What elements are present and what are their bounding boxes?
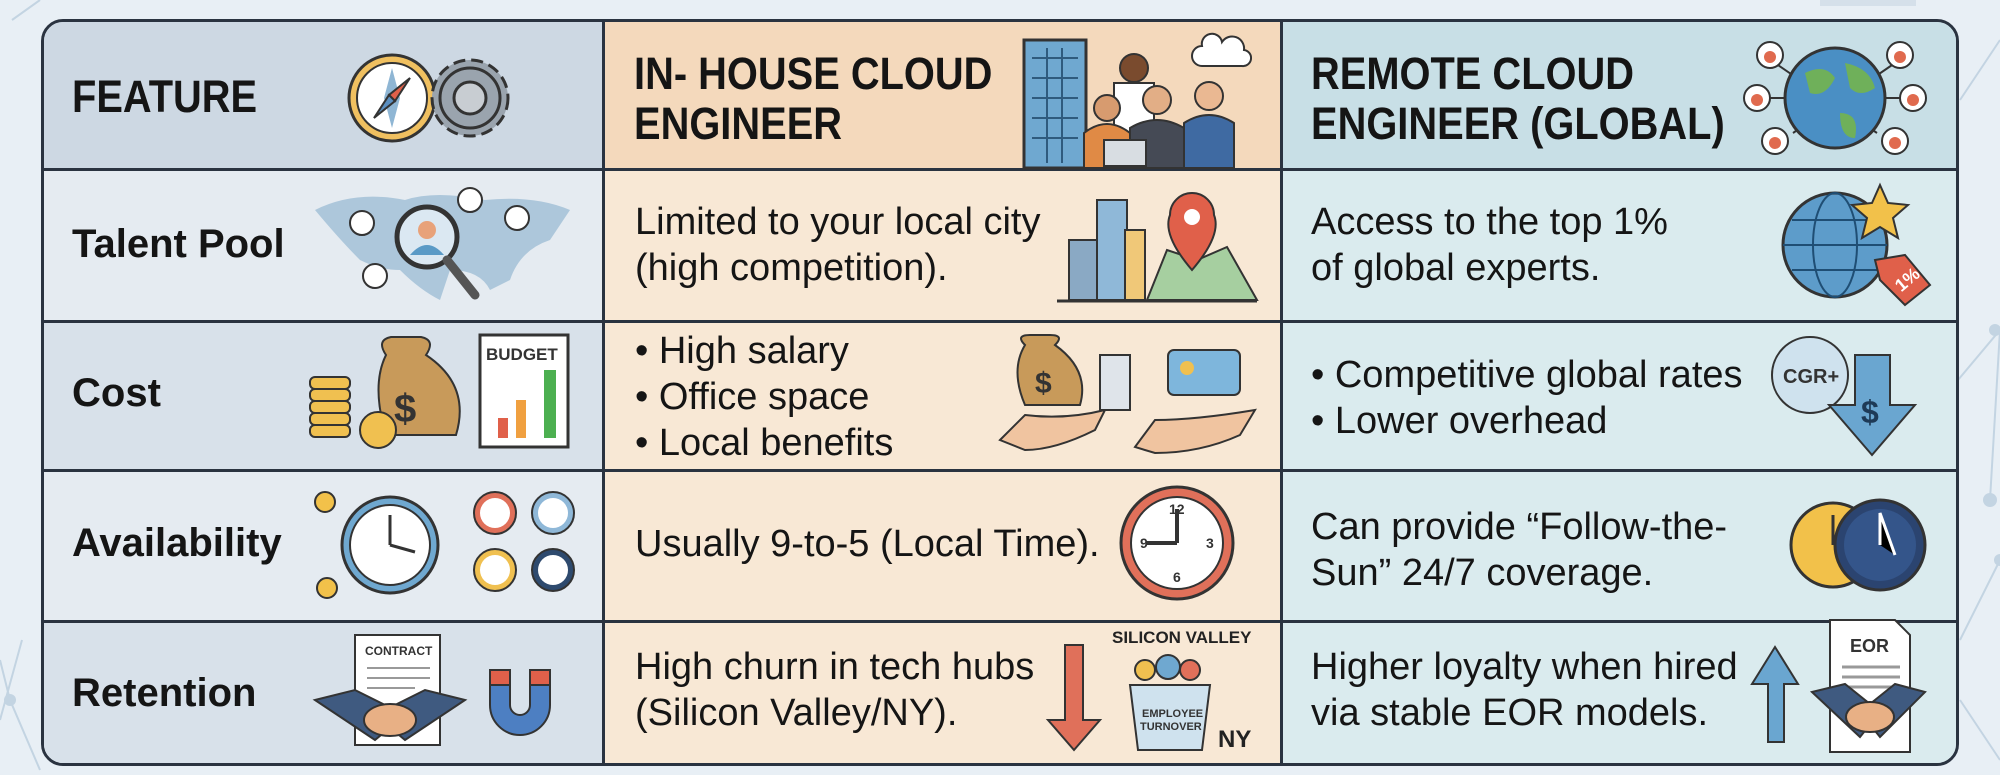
text: in-house retention — [635, 646, 1034, 734]
text: remote cost: • Competitive global rates — [1311, 354, 1743, 396]
icon: money bag and budget — [309, 334, 570, 449]
icon: globe with star and tag: 1% — [1891, 263, 1924, 296]
text: remote talent pool: Access to the top 1% — [1311, 201, 1668, 243]
text: in-house talent pool: Limited to your local city — [635, 201, 1040, 243]
icon: clocks sun moon — [314, 491, 575, 599]
text: remote availability: Can provide “Follow-the- — [1311, 506, 1727, 548]
heading: remote: ENGINEER (GLOBAL) — [1311, 98, 1725, 149]
icon: wall clock: 3 — [1206, 535, 1214, 551]
text: in-house cost: • High salary — [635, 330, 849, 372]
icon: hands with money and id — [998, 334, 1257, 454]
text: remote cost: • Lower overhead — [1311, 400, 1607, 442]
text: remote talent pool — [1311, 201, 1668, 289]
text: in-house talent pool — [635, 201, 1040, 289]
icon: compass and gear — [348, 54, 510, 142]
icon: money bag and budget: BUDGET — [486, 345, 558, 364]
icon: globe with star and tag — [1782, 182, 1932, 306]
icon: wall clock — [1120, 486, 1234, 600]
row label: availability: Availability — [72, 521, 282, 565]
icon: turnover bucket: NY — [1218, 726, 1251, 753]
text: in-house retention: High churn in tech hubs — [635, 646, 1034, 688]
icon: up arrow and EOR handshake — [1750, 619, 1927, 753]
icon: globe and down dollar arrow: $ — [1861, 394, 1879, 430]
row label: talent pool: Talent Pool — [72, 222, 285, 266]
text: in-house availability: Usually 9-to-5 (Local Time). — [635, 523, 1100, 565]
heading: remote: REMOTE CLOUD — [1311, 48, 1634, 99]
text: remote retention: via stable EOR models. — [1311, 692, 1708, 734]
icon: world map search — [315, 187, 570, 300]
text: in-house cost: • Office space — [635, 376, 869, 418]
text: remote cost — [1311, 354, 1743, 442]
icon: contract handshake and magnet — [312, 634, 551, 746]
icon: wall clock: 12 — [1169, 501, 1185, 517]
icon: money bag and budget: $ — [394, 387, 416, 431]
icon: turnover bucket: TURNOVER — [1140, 721, 1202, 733]
icon: sun and moon clocks — [1790, 498, 1926, 592]
icon: up arrow and EOR handshake: EOR — [1850, 636, 1889, 656]
icon: office team — [1022, 32, 1252, 170]
icon: contract handshake and magnet: CONTRACT — [365, 644, 433, 658]
text: remote availability: Sun” 24/7 coverage. — [1311, 552, 1653, 594]
heading: in-house — [634, 48, 992, 149]
row label: retention: Retention — [72, 671, 256, 715]
text: in-house talent pool: (high competition). — [635, 247, 948, 289]
icon: turnover bucket: EMPLOYEE — [1142, 708, 1203, 720]
text: remote retention: Higher loyalty when hired — [1311, 646, 1738, 688]
heading: in-house: ENGINEER — [634, 98, 842, 149]
text: in-house cost: • Local benefits — [635, 422, 893, 464]
icon: globe and down dollar arrow: CGR+ — [1783, 366, 1839, 388]
icon: wall clock: 9 — [1140, 535, 1148, 551]
row label: cost: Cost — [72, 371, 161, 415]
text: remote retention — [1311, 646, 1738, 734]
icon: turnover bucket: SILICON VALLEY — [1112, 628, 1252, 647]
icon: hands with money and id: $ — [1035, 367, 1052, 400]
text: in-house retention: (Silicon Valley/NY). — [635, 692, 957, 734]
text: in-house cost — [635, 330, 893, 464]
icon: wall clock: 6 — [1173, 569, 1181, 585]
icon: turnover bucket — [1046, 628, 1252, 753]
heading: in-house: IN- HOUSE CLOUD — [634, 48, 992, 99]
heading: feature: FEATURE — [72, 71, 257, 122]
heading: remote — [1311, 48, 1725, 149]
icon: network globe — [1743, 41, 1927, 155]
text: remote availability — [1311, 506, 1727, 594]
icon: globe and down dollar arrow — [1771, 336, 1918, 456]
text: remote talent pool: of global experts. — [1311, 247, 1600, 289]
icon: city and map pin — [1057, 192, 1259, 302]
